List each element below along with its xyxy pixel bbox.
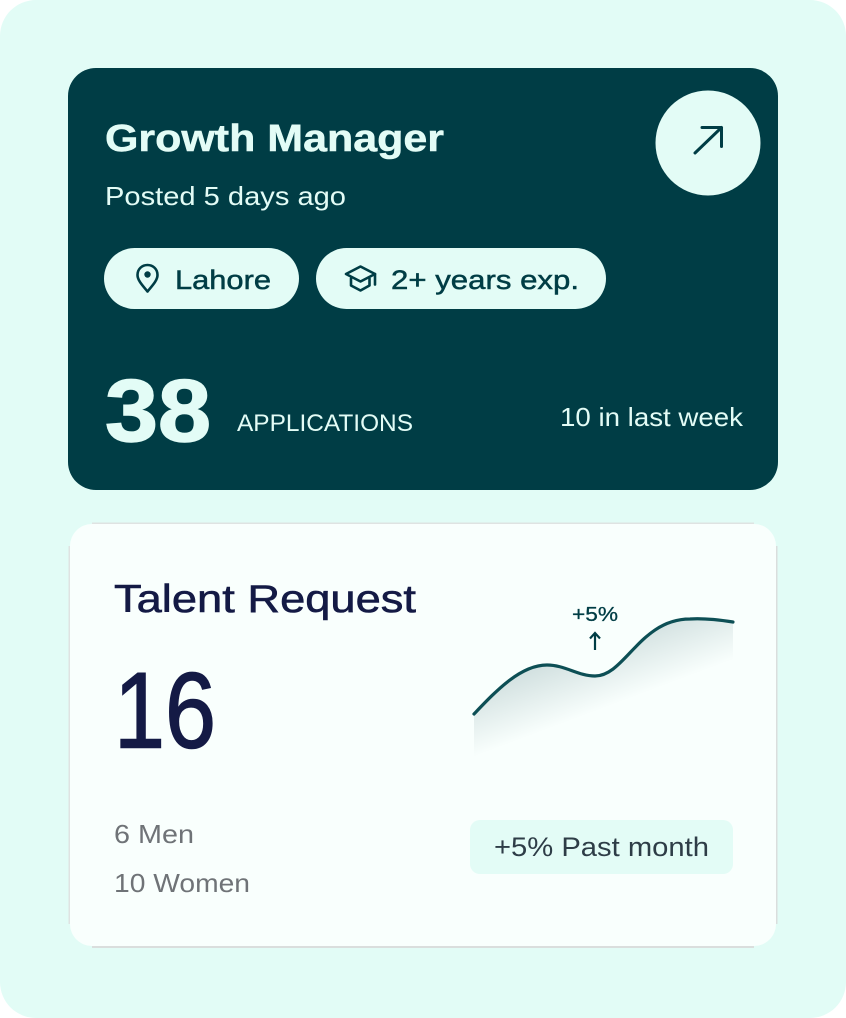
applications count: 38 (105, 361, 211, 460)
location pill (104, 248, 299, 309)
icon: graduation cap (346, 266, 375, 290)
icon: up arrow (590, 633, 600, 650)
chart change label: +5% (572, 604, 618, 626)
line chart (474, 604, 733, 760)
women count: 10 Women (114, 868, 250, 898)
open arrow button (656, 90, 760, 196)
panel: job card (68, 68, 778, 490)
men count: 6 Men (114, 819, 194, 849)
applications label: APPLICATIONS (237, 410, 413, 437)
talent request count: 16 (114, 650, 216, 770)
talent request heading: Talent Request (114, 578, 416, 621)
panel: talent request (68, 522, 778, 948)
location label: Lahore (175, 265, 271, 295)
job title: Growth Manager (105, 118, 444, 160)
weekly applications note: 10 in last week (560, 402, 744, 432)
past month label: +5% Past month (494, 832, 709, 862)
experience pill (316, 248, 606, 309)
experience label: 2+ years exp. (391, 265, 579, 295)
past month badge (470, 820, 733, 874)
posted date: Posted 5 days ago (105, 181, 346, 211)
icon: location pin (138, 265, 158, 292)
